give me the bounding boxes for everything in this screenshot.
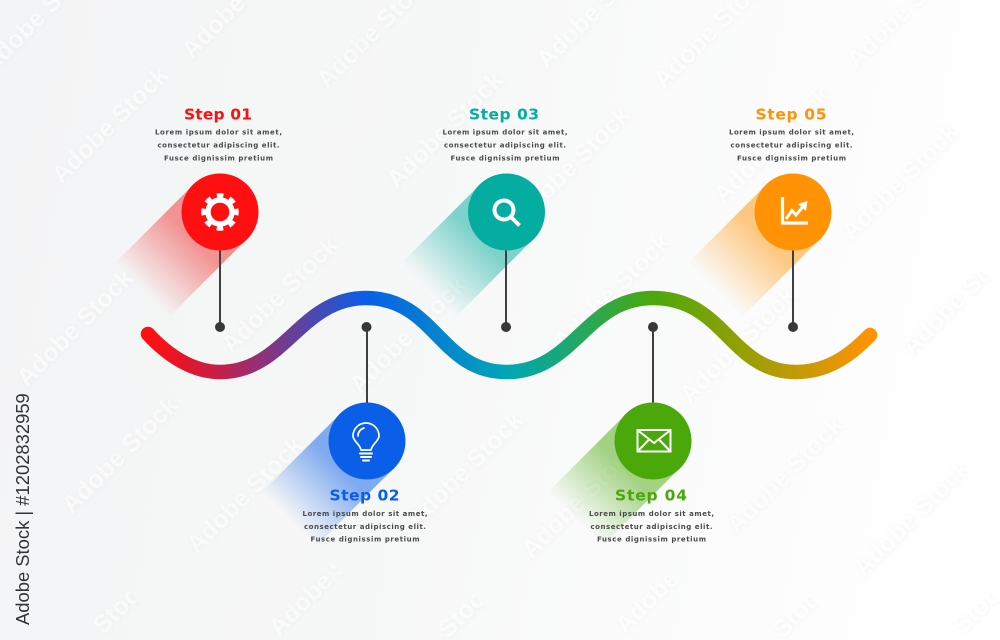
icon: gear [201,193,239,231]
shadow: step 05 [688,185,820,317]
watermark pattern: Adobe Stock [46,61,174,189]
text: step 04: consectetur adipiscing elit. [590,523,712,531]
watermark pattern: Adobe Stock [381,66,509,194]
shadow: step 03 [402,185,534,317]
watermark pattern: Adobe Stock [508,101,636,229]
watermark pattern: Adobe Stock [344,271,472,399]
text: step 01: consectetur adipiscing elit. [158,142,280,150]
shadow: step 01 [115,185,247,317]
text: step 02: Fusce dignissim pretium [310,536,420,544]
step 04 marker [614,322,692,480]
step 05 marker [754,174,832,332]
icon: envelope [638,430,670,452]
step 01 marker [182,174,258,332]
watermark pattern: Adobe Stock [216,231,344,359]
wavy gradient timeline [148,298,870,372]
watermark pattern: Adobe Stock [848,454,976,582]
text: step 05 [729,106,854,162]
text: step 04: Fusce dignissim pretium [597,536,706,544]
text: step 01: Fusce dignissim pretium [164,154,273,162]
text: step 03: Fusce dignissim pretium [450,154,560,162]
text: step 02: Lorem ipsum dolor sit amet, [302,510,428,518]
watermark pattern: Adobe Stock [708,81,836,209]
watermark pattern: Adobe Stock [548,228,676,356]
text: step 05: consectetur adipiscing elit. [730,142,852,150]
text: step 05: Lorem ipsum dolor sit amet, [729,128,854,136]
text: step 04 [589,486,714,544]
text: step 02: Step 02 [330,486,400,504]
icon: light bulb [353,423,379,460]
watermark pattern: Adobe Stock [516,436,644,564]
icon: growth chart [782,197,808,223]
watermark pattern: Adobe Stock [181,431,309,559]
text: step 01: Lorem ipsum dolor sit amet, [155,128,282,136]
text: step 03: Step 03 [469,106,539,124]
text: step 04: Step 04 [615,486,687,504]
step 02 marker [328,322,406,480]
text: step 01 [155,106,282,162]
text: step 05: Step 05 [756,106,826,124]
watermark pattern: Adobe Stock [674,281,802,409]
text: step 03: Lorem ipsum dolor sit amet, [442,128,568,136]
text: step 02 [302,486,428,544]
shadow: step 02 [262,414,394,546]
watermark pattern: Adobe Stock [401,406,529,534]
watermark pattern: Adobe Stock [721,411,849,539]
text: step 03: consectetur adipiscing elit. [444,142,566,150]
stock image id label: Adobe Stock | #1202832959 [12,393,33,625]
watermark pattern: Adobe Stock [56,391,184,519]
watermark pattern: Adobe Stock [836,118,964,246]
text: step 05: Fusce dignissim pretium [737,154,846,162]
text: step 03 [442,106,568,162]
text: step 02: consectetur adipiscing elit. [304,523,426,531]
icon: magnifier [494,200,520,226]
step 03 marker [468,174,545,332]
shadow: step 04 [548,414,680,546]
text: step 01: Step 01 [184,106,252,124]
text: step 04: Lorem ipsum dolor sit amet, [589,510,714,518]
watermark pattern: Adobe Stock [11,264,139,392]
